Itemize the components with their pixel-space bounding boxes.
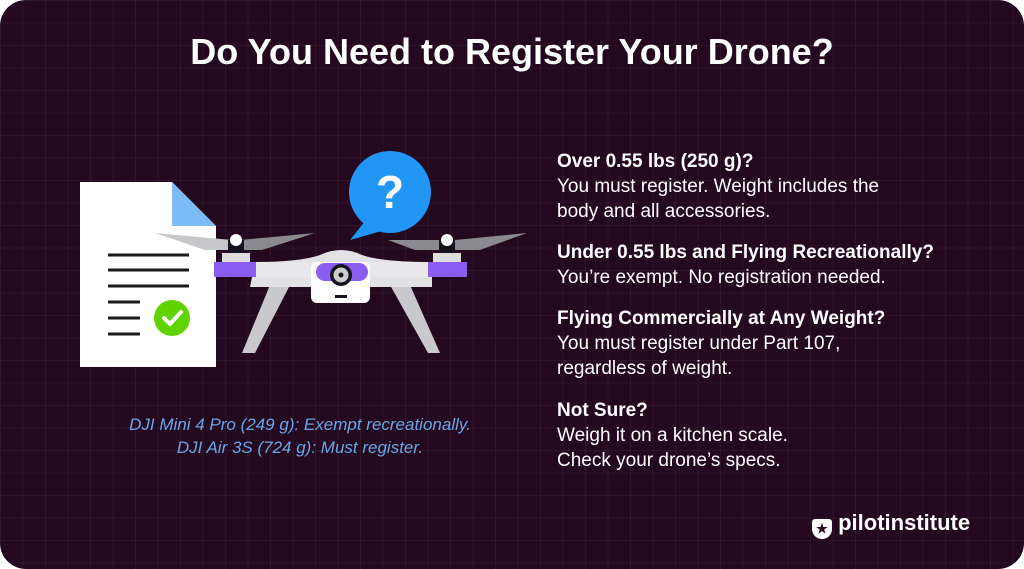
title: Do You Need to Register Your Drone?: [190, 31, 834, 72]
illustration: [80, 151, 527, 367]
logo: ★: [816, 521, 828, 536]
text: commercial: Flying Commercially at Any Weight?: [557, 308, 885, 329]
text: over 0.55 lbs: [557, 151, 879, 222]
text: under 0.55 lbs: [557, 242, 934, 288]
text: over 0.55 lbs: You must register. Weight includes the body and all accessories.: [557, 176, 879, 222]
text: not sure: Weigh it on a kitchen scale.: [557, 425, 788, 446]
text: commercial: [557, 308, 885, 379]
note: drone examples: DJI Air 3S (724 g): Must register.: [177, 438, 423, 457]
logo: pilotinstitute: [838, 510, 970, 535]
icon: question bubble: [349, 151, 431, 240]
text: not sure: Check your drone’s specs.: [557, 450, 781, 471]
text: not sure: [557, 400, 788, 471]
text: not sure: Not Sure?: [557, 400, 648, 421]
text: commercial: You must register under Part 107, regardless of weight.: [557, 333, 840, 379]
text: under 0.55 lbs: Under 0.55 lbs and Flying Recreationally?: [557, 242, 934, 263]
text: over 0.55 lbs: Over 0.55 lbs (250 g)?: [557, 151, 753, 172]
note: drone examples: [129, 415, 471, 457]
note: drone examples: DJI Mini 4 Pro (249 g): Exempt recreationally.: [129, 415, 471, 434]
icon: question bubble: ?: [376, 166, 404, 218]
icon: drone: [155, 233, 527, 353]
text: under 0.55 lbs: You’re exempt. No registration needed.: [557, 267, 886, 288]
icon: document: [80, 182, 216, 367]
